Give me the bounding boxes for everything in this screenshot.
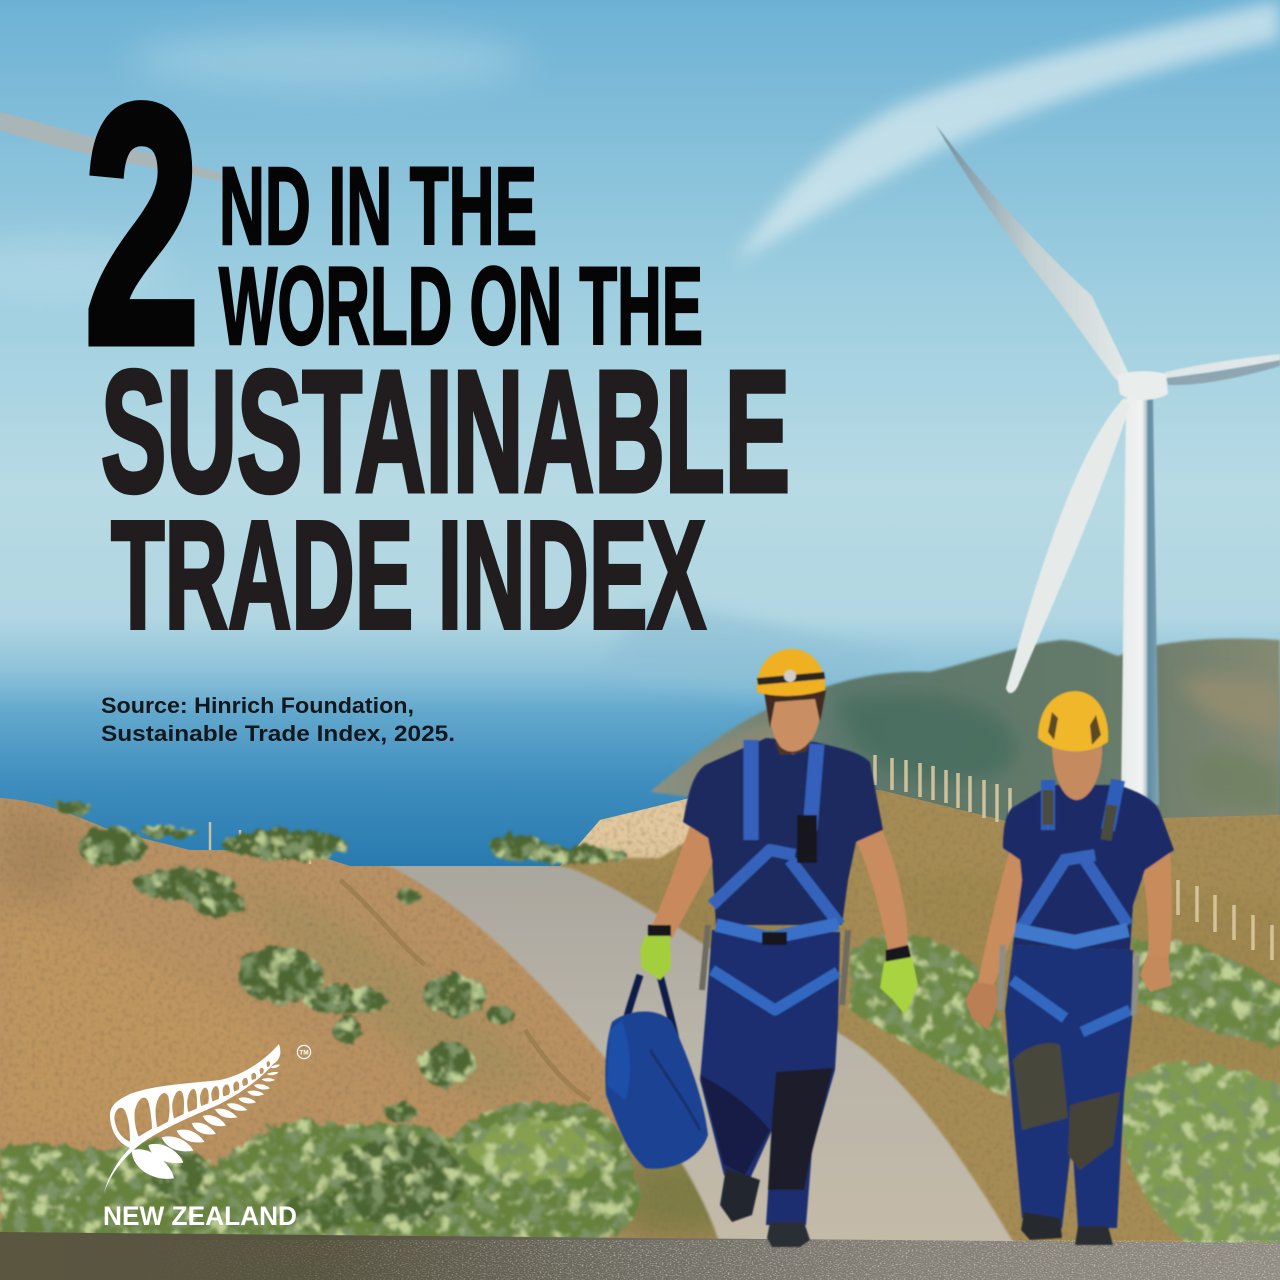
TRADE INDEX: TRADE INDEX bbox=[111, 489, 706, 661]
big numeral 2: 2 bbox=[84, 35, 200, 415]
wind turbine bbox=[936, 125, 1280, 805]
blade down bbox=[1006, 398, 1130, 693]
WORLD ON THE: WORLD ON THE bbox=[219, 245, 703, 368]
face bbox=[1052, 745, 1102, 800]
helmet bbox=[1038, 691, 1108, 751]
shaded and lit hill patches bbox=[0, 800, 820, 1240]
shirt bbox=[1003, 785, 1174, 950]
knee pads bbox=[1013, 1043, 1068, 1130]
sandy patch bbox=[576, 798, 690, 860]
source note bbox=[101, 693, 455, 746]
hair bbox=[764, 690, 826, 728]
distant headland bbox=[600, 608, 920, 700]
fences bbox=[210, 755, 1272, 960]
hub bbox=[1117, 371, 1168, 400]
hands bbox=[965, 982, 998, 1030]
man on left walking with bag bbox=[605, 649, 918, 1247]
right-side bush fields bbox=[850, 934, 1280, 1245]
source note: Source: Hinrich Foundation, bbox=[101, 693, 414, 718]
harness bbox=[702, 740, 848, 1010]
far hills ridge bbox=[650, 639, 1280, 840]
neck and face bbox=[768, 695, 822, 754]
shirt bbox=[683, 738, 883, 925]
turbine foreground blade top-left bbox=[0, 112, 222, 181]
foreground bushes bbox=[0, 1102, 640, 1240]
source note: Sustainable Trade Index, 2025. bbox=[101, 721, 455, 746]
arms bbox=[977, 850, 1040, 990]
trademark symbol bbox=[297, 1045, 311, 1059]
blade right bbox=[1165, 354, 1280, 385]
bag bbox=[605, 975, 708, 1169]
clouds bbox=[0, 32, 530, 300]
ND IN THE: ND IN THE bbox=[219, 145, 537, 268]
shoes bbox=[720, 1168, 760, 1222]
hill shading bbox=[680, 676, 1280, 815]
wrist bands and gloves bbox=[640, 925, 918, 1015]
harness bbox=[1000, 780, 1137, 1032]
man on right walking bbox=[965, 691, 1174, 1245]
trousers bbox=[1005, 945, 1133, 1228]
blade up bbox=[936, 125, 1128, 380]
headline bbox=[84, 35, 790, 661]
helmet bbox=[757, 649, 825, 696]
fern mark bbox=[104, 1044, 280, 1193]
gravel path foreground bbox=[0, 1232, 1280, 1280]
gravel road bbox=[385, 863, 1015, 1245]
hillside grain bbox=[0, 790, 1280, 1250]
trademark symbol: TM bbox=[299, 1050, 309, 1056]
trousers bbox=[700, 930, 840, 1225]
NEW ZEALAND wordmark: NEW ZEALAND bbox=[103, 1201, 297, 1231]
New Zealand fern logo bbox=[103, 1044, 311, 1231]
arms bbox=[650, 815, 720, 938]
knee pad bbox=[768, 1068, 833, 1190]
sky and sea bbox=[0, 0, 1280, 880]
turbine tower bbox=[1121, 398, 1159, 805]
dirt track bbox=[340, 880, 590, 1100]
land base bbox=[0, 780, 1280, 1260]
fern leaflets bbox=[132, 1064, 280, 1179]
distant bushes on left hill bbox=[57, 801, 627, 1121]
shoes bbox=[1021, 1212, 1062, 1240]
contrail cloud bbox=[735, 0, 1280, 262]
right brown hillside bbox=[560, 790, 1280, 1250]
